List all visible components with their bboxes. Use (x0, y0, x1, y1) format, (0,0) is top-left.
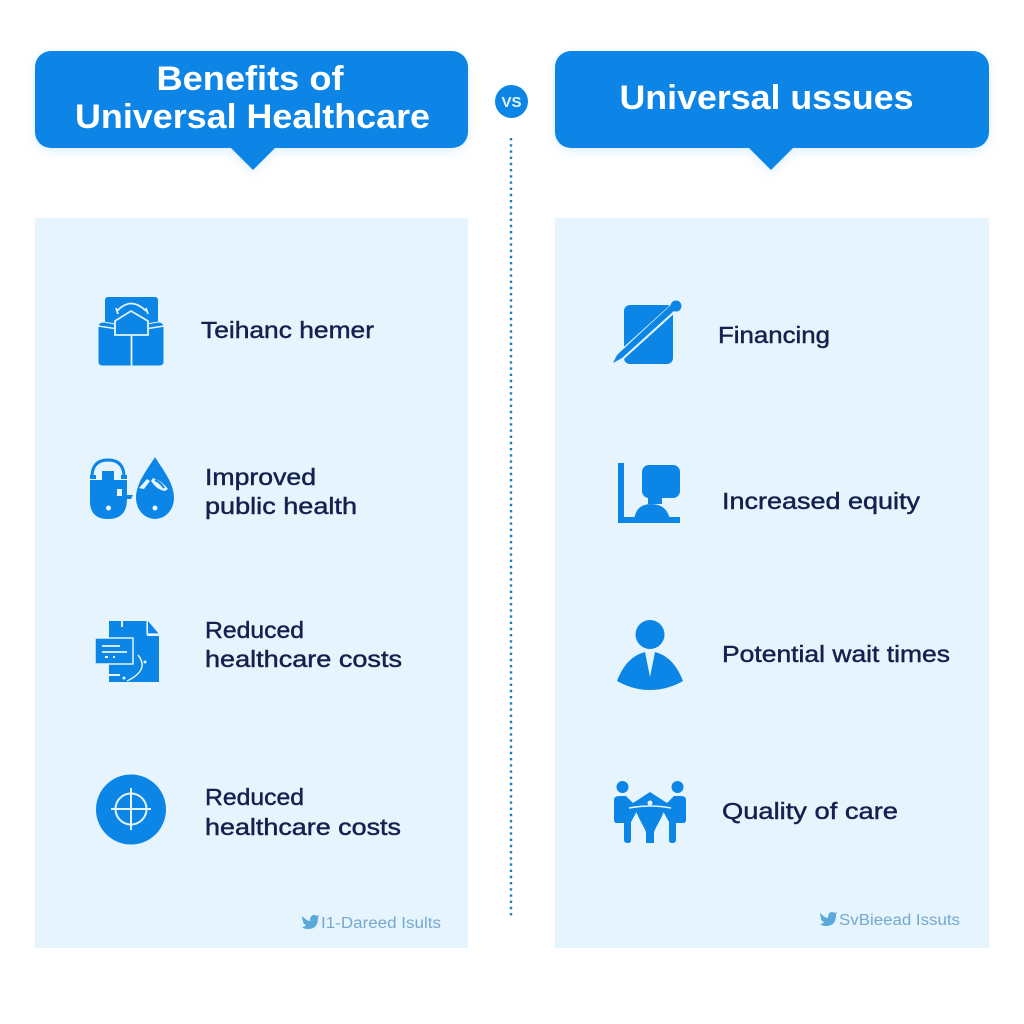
text: Increased equity: Increased equity (722, 488, 921, 514)
heading banner: issues: Universal ussues (620, 79, 914, 117)
dotted divider (510, 138, 512, 916)
text: Financing: Financing (718, 322, 830, 348)
icon: notepad with pen (613, 300, 682, 364)
text: Reduced healthcare costs (repeat): healthcare costs (205, 814, 401, 840)
text: Quality of care: Quality of care (722, 798, 898, 824)
text: Reduced healthcare costs: Reduced (205, 617, 304, 643)
heading banner: benefits: Benefits of (156, 60, 344, 98)
text: Reduced healthcare costs (repeat): Reduced (205, 784, 304, 810)
footer: issues note: SvBieead Issuts (839, 912, 960, 929)
text: Reduced healthcare costs (repeat) (205, 784, 401, 840)
text: Reduced healthcare costs: healthcare costs (205, 646, 402, 672)
panel: issues background (555, 218, 989, 948)
text: Potential wait times: Potential wait times (722, 641, 950, 667)
vs badge (495, 85, 528, 118)
icon: medical case (98, 297, 164, 366)
icon: person bust (617, 620, 683, 690)
heading banner: benefits (35, 51, 468, 170)
icon: people at table (614, 781, 686, 843)
text: Improved public health (205, 464, 357, 519)
icon: person at desk (618, 463, 680, 523)
panel: benefits background (35, 218, 468, 948)
icon: crosshair (96, 774, 166, 844)
icon: documents (95, 621, 159, 682)
heading banner: issues (555, 51, 989, 170)
text: Improved public health: public health (205, 493, 357, 519)
text: Teihanc hemer: Teihanc hemer (201, 317, 374, 343)
text: Reduced healthcare costs (205, 617, 402, 672)
text: Improved public health: Improved (205, 464, 316, 490)
heading banner: benefits: Universal Healthcare (75, 98, 430, 136)
vs badge: VS (502, 94, 522, 111)
icon: kettle and drop (90, 457, 174, 519)
footer: benefits note: I1-Dareed Isults (321, 915, 441, 932)
